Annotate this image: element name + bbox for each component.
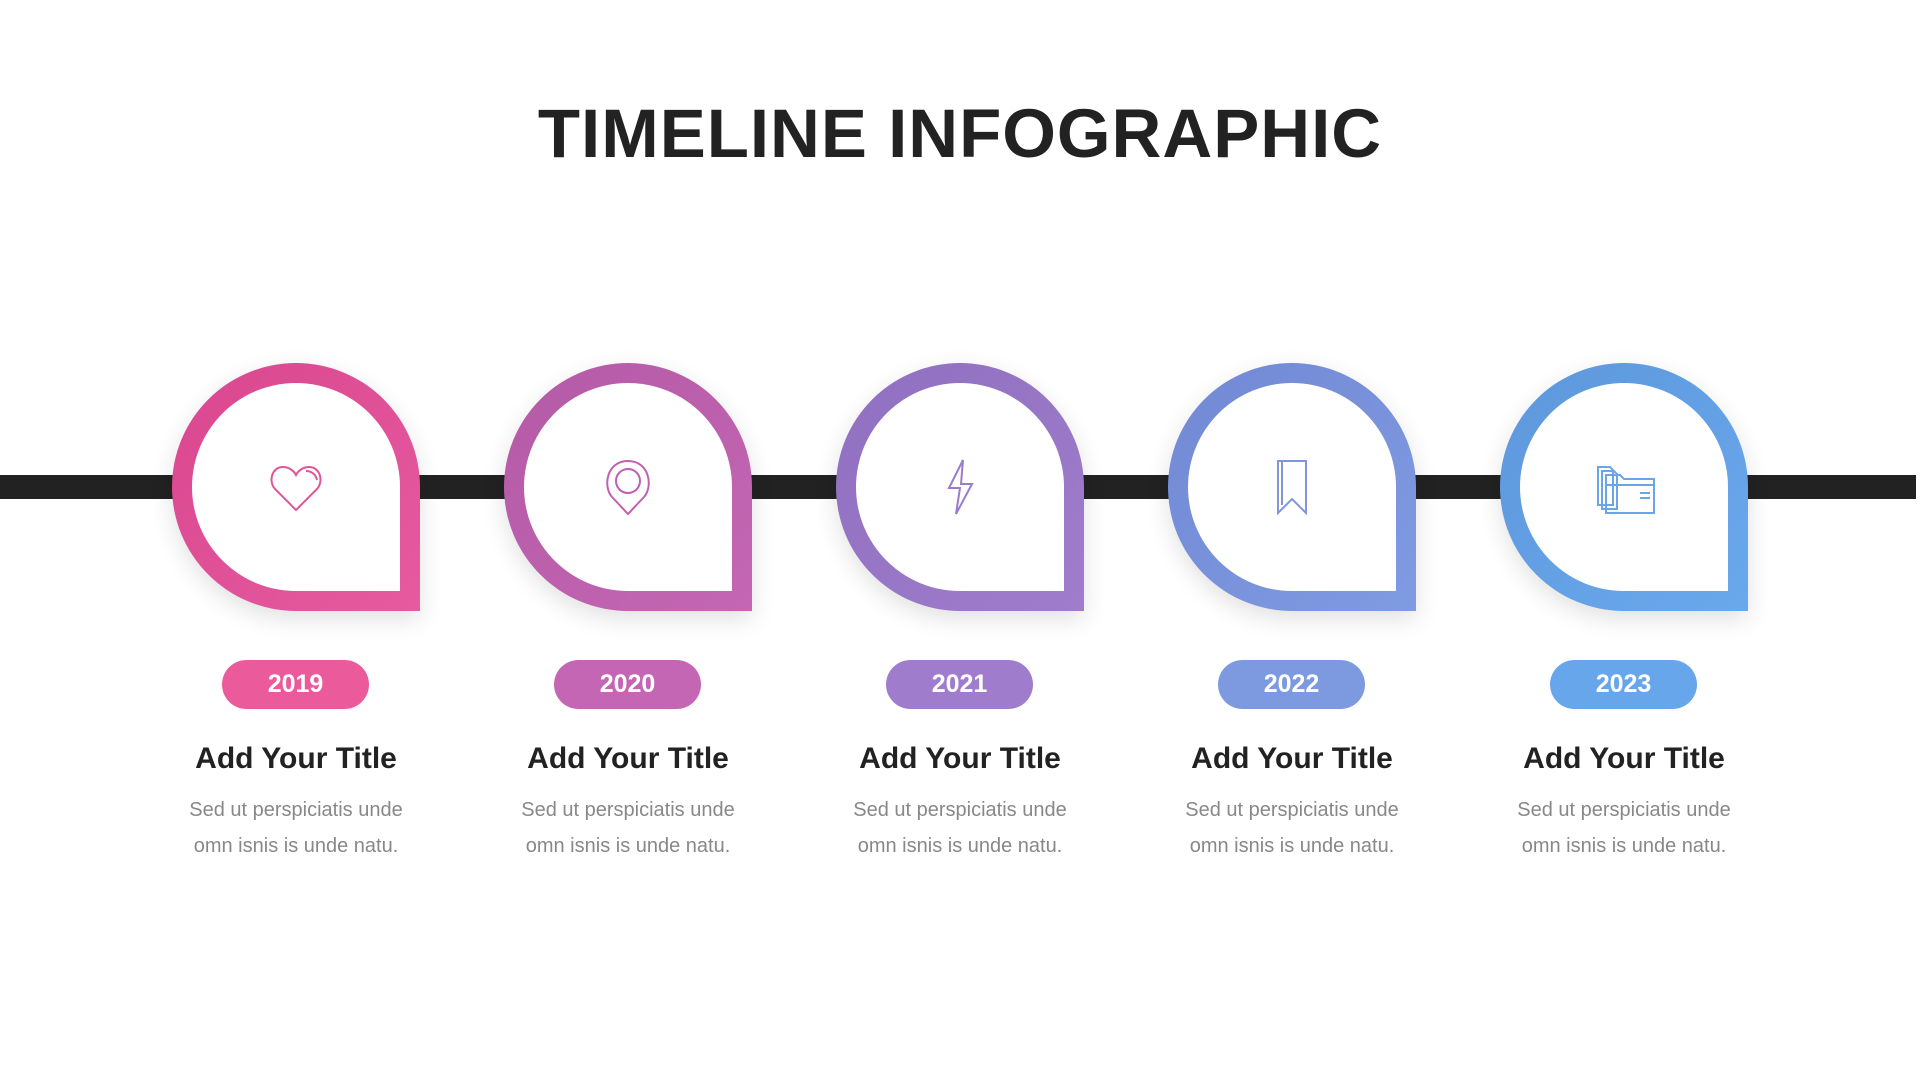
body text: [1517, 799, 1731, 857]
heading: Add Your Title: [527, 742, 729, 775]
step 2020: [498, 363, 758, 857]
body text: [1185, 799, 1399, 857]
pill 2023: [1550, 660, 1697, 709]
body text: Sed ut perspiciatis unde: [189, 799, 403, 821]
body text: omn isnis is unde natu.: [526, 835, 730, 857]
body text: [521, 799, 735, 857]
body text: omn isnis is unde natu.: [858, 835, 1062, 857]
pill 2022: [1218, 660, 1365, 709]
heading: Add Your Title: [859, 742, 1061, 775]
body text: Sed ut perspiciatis unde: [521, 799, 735, 821]
heading: Add Your Title: [1523, 742, 1725, 775]
marker 2021: [836, 363, 1084, 611]
body text: [853, 799, 1067, 857]
marker 2019: [172, 363, 420, 611]
step 2022: [1162, 363, 1422, 857]
body text: omn isnis is unde natu.: [1190, 835, 1394, 857]
pill 2021: 2021: [932, 670, 987, 698]
pill 2021: [886, 660, 1033, 709]
body text: Sed ut perspiciatis unde: [1185, 799, 1399, 821]
pill 2020: 2020: [600, 670, 655, 698]
step 2019: [166, 363, 426, 857]
body text: Sed ut perspiciatis unde: [853, 799, 1067, 821]
pill 2019: [222, 660, 369, 709]
pill 2019: 2019: [268, 670, 323, 698]
pill 2020: [554, 660, 701, 709]
pill 2022: 2022: [1264, 670, 1319, 698]
step 2023: [1494, 363, 1754, 857]
pill 2023: 2023: [1596, 670, 1651, 698]
timeline bar: [0, 475, 1916, 499]
heading: Add Your Title: [195, 742, 397, 775]
body text: Sed ut perspiciatis unde: [1517, 799, 1731, 821]
body text: omn isnis is unde natu.: [194, 835, 398, 857]
body text: [189, 799, 403, 857]
marker 2020: [504, 363, 752, 611]
title: TIMELINE INFOGRAPHIC: [538, 95, 1382, 172]
marker 2022: [1168, 363, 1416, 611]
body text: omn isnis is unde natu.: [1522, 835, 1726, 857]
marker 2023: [1500, 363, 1748, 611]
heading: Add Your Title: [1191, 742, 1393, 775]
step 2021: [830, 363, 1090, 857]
